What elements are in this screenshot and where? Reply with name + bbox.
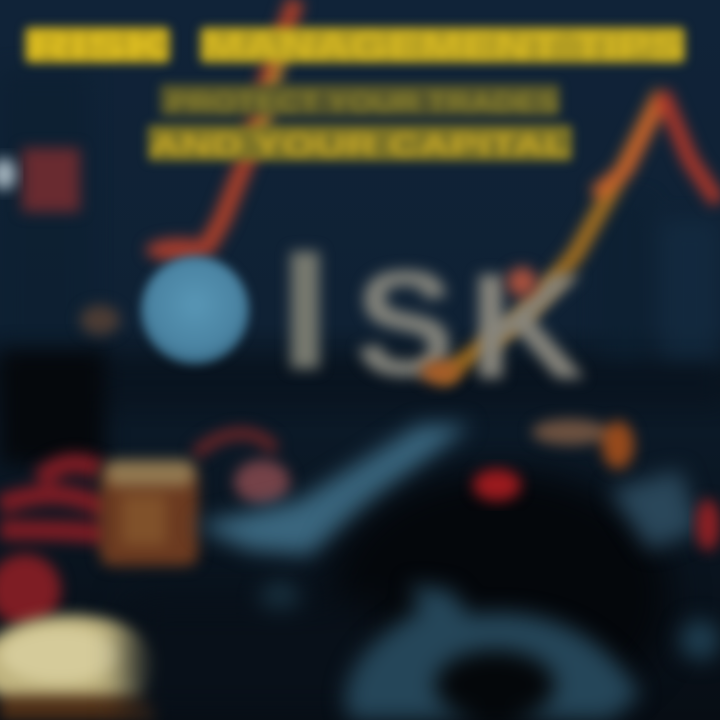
big word RISK (284, 220, 586, 410)
orange accent on K (420, 267, 537, 384)
tan cup (100, 460, 198, 566)
rising trend line left (80, 0, 296, 335)
red warning light (473, 469, 521, 501)
red edge accent (696, 499, 720, 551)
red square icon (22, 148, 80, 212)
gear highlight (345, 585, 640, 720)
big word RISK: S (355, 239, 455, 407)
white dot icon (0, 158, 16, 190)
subtitle: AND YOUR CAPITAL (150, 129, 570, 162)
dark gear (130, 470, 670, 720)
cream coin stack (0, 615, 160, 720)
big word RISK: K (468, 242, 586, 410)
teal angular shape (195, 425, 470, 625)
title: MANAGEMENT TIPS (203, 26, 683, 68)
rising trend line right (440, 92, 718, 378)
side teal facets (610, 470, 720, 660)
orange highlight (532, 419, 634, 469)
big word RISK: I (284, 220, 326, 399)
red ribbons left (0, 434, 290, 626)
chart backdrop columns (0, 70, 720, 370)
subtitle: PROTECT YOUR TRADES (168, 87, 558, 117)
title: RISK (28, 26, 169, 68)
subtitle (148, 84, 572, 162)
blue circle forming the letter R (141, 256, 249, 364)
dark horizontal band (0, 350, 720, 465)
title (25, 26, 685, 68)
